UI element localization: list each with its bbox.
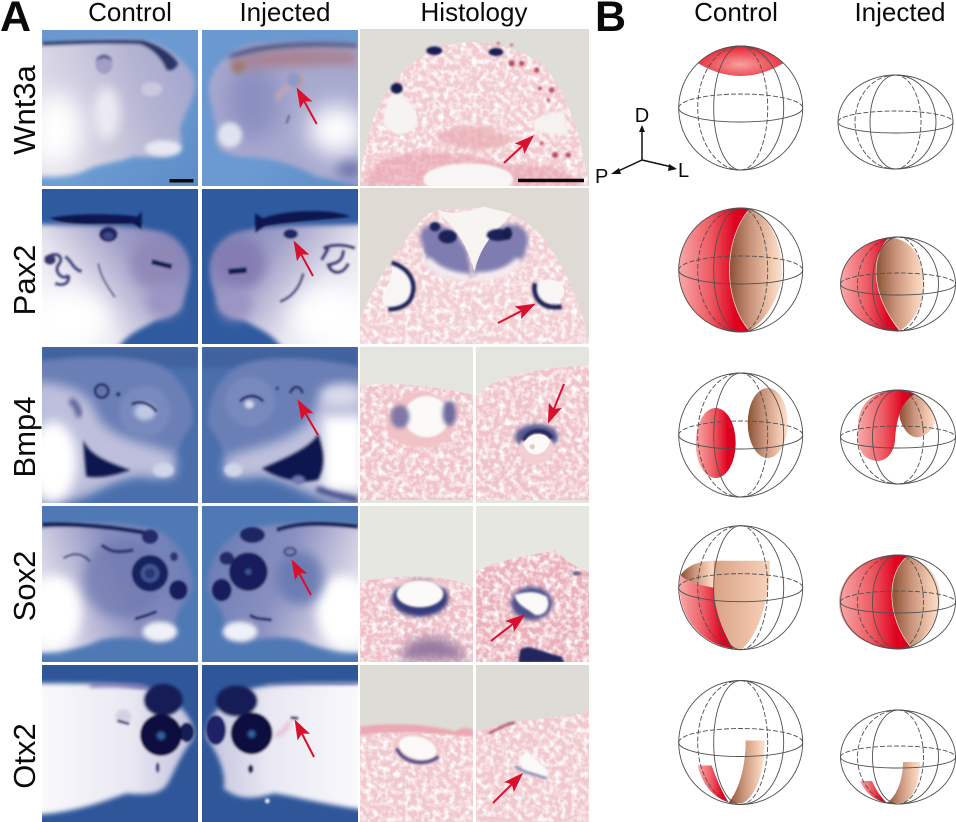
model: Bmp4 injected sphere	[840, 390, 956, 484]
red hemisphere	[839, 555, 911, 649]
row label Sox2: Sox2	[7, 551, 42, 621]
histology: Otx2 control section	[360, 665, 473, 822]
tan interior	[729, 209, 782, 331]
red patch	[858, 390, 915, 461]
model: Wnt3a control sphere	[679, 46, 803, 170]
model: Otx2 control sphere	[679, 680, 803, 804]
tan interior	[876, 238, 924, 331]
row label Wnt3a: Wnt3a	[7, 64, 42, 155]
photo: Wnt3a control embryo	[32, 30, 198, 186]
histology: Pax2 section	[360, 188, 589, 344]
red arrow	[504, 137, 532, 163]
photo: Otx2 injected embryo	[202, 665, 367, 822]
red arrow	[498, 305, 533, 323]
model: Wnt3a injected sphere	[838, 75, 953, 169]
axes: D, P, L orientation: P	[595, 166, 608, 188]
red arrow	[293, 562, 311, 595]
red ribbon	[860, 781, 887, 803]
photo: Pax2 injected embryo	[202, 189, 367, 350]
axes: D, P, L orientation: D	[635, 105, 649, 127]
model: Sox2 control sphere	[679, 526, 803, 650]
histology: Wnt3a section	[360, 29, 589, 195]
tan ribbon	[887, 762, 920, 803]
red patch	[696, 408, 736, 478]
red arrow	[549, 384, 564, 421]
row label Pax2: Pax2	[7, 245, 42, 315]
red ribbon	[698, 766, 729, 802]
histology: Bmp4 injected section	[476, 347, 589, 503]
photo: Sox2 control embryo	[28, 506, 198, 662]
red arrow	[295, 243, 313, 276]
scale bar	[170, 179, 194, 182]
tan upper inner band	[681, 561, 715, 588]
histology: Sox2 injected section	[476, 506, 589, 663]
scale bar	[518, 179, 584, 182]
histology: Bmp4 control section	[360, 347, 473, 503]
red arrow	[493, 775, 521, 803]
tan ribbon	[729, 740, 765, 804]
red hemisphere	[841, 238, 900, 331]
red arrow	[491, 616, 523, 641]
model: Bmp4 control sphere	[679, 373, 803, 497]
photo: Bmp4 control embryo	[30, 347, 198, 505]
red arrow	[298, 90, 317, 124]
red arrow	[296, 722, 314, 757]
photo: Sox2 injected embryo	[202, 506, 370, 662]
tan front wall	[714, 561, 770, 649]
axes: D, P, L orientation	[595, 105, 689, 188]
histology: Sox2 control section	[360, 506, 473, 663]
dorsal red cap	[698, 46, 784, 76]
model: Otx2 injected sphere	[840, 710, 956, 804]
photo: Bmp4 injected embryo	[202, 347, 367, 505]
photo: Pax2 control embryo	[42, 189, 198, 344]
histology: Otx2 injected section	[476, 665, 589, 822]
tan interior	[892, 556, 940, 648]
axes: D, P, L orientation: L	[678, 160, 689, 182]
model: Sox2 injected sphere	[839, 555, 956, 649]
model: Pax2 control sphere	[678, 208, 803, 332]
red arrow	[299, 402, 318, 435]
photo: Wnt3a injected embryo	[202, 30, 367, 187]
red hemisphere	[678, 208, 750, 332]
red lower wall	[679, 575, 734, 649]
tan patch	[900, 394, 935, 437]
tan patch	[748, 388, 788, 458]
model: Pax2 injected sphere	[840, 237, 956, 331]
row label Bmp4: Bmp4	[7, 397, 42, 477]
row label Otx2: Otx2	[7, 723, 42, 789]
photo: Otx2 control embryo	[33, 665, 198, 822]
